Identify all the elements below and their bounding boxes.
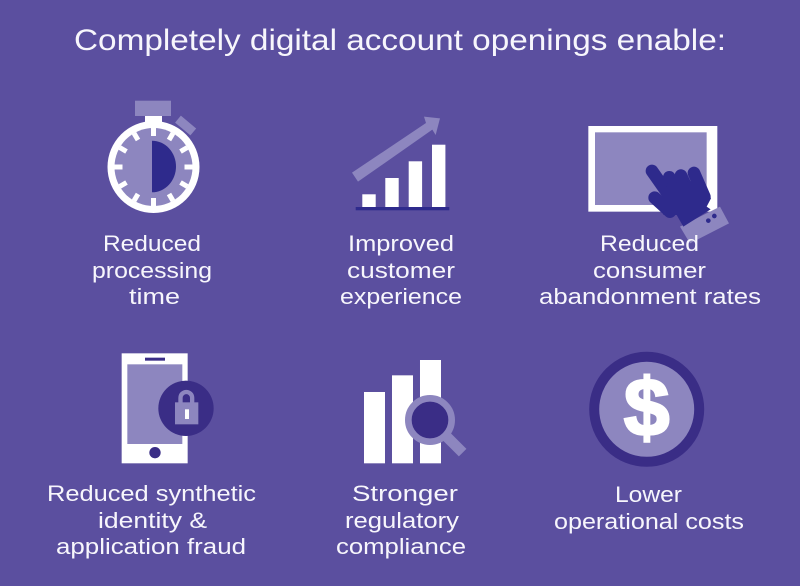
label: reduced processing time: [92, 231, 212, 309]
label: reduced synthetic identity and application fraud: Reduced synthetic: [47, 481, 256, 506]
label: reduced processing time: time: [129, 284, 180, 309]
label: reduced processing time: processing: [92, 258, 212, 283]
label: lower operational costs: operational costs: [554, 509, 744, 534]
label: reduced synthetic identity and application fraud: [47, 481, 256, 559]
icon: dollar coin: [594, 357, 699, 462]
icon: stopwatch: [108, 101, 200, 213]
label: lower operational costs: Lower: [615, 482, 682, 507]
label: reduced consumer abandonment rates: [539, 231, 761, 309]
label: stronger regulatory compliance: regulatory: [345, 508, 459, 533]
icon: rising bar chart with arrow: [352, 117, 449, 210]
label: improved customer experience: experience: [340, 284, 462, 309]
icon: dollar coin: $: [624, 362, 670, 454]
label: reduced synthetic identity and application fraud: identity &: [98, 508, 207, 533]
label: reduced synthetic identity and application fraud: application fraud: [56, 534, 246, 559]
label: stronger regulatory compliance: Stronger: [352, 481, 458, 506]
label: stronger regulatory compliance: [336, 481, 466, 559]
label: stronger regulatory compliance: compliance: [336, 534, 466, 559]
label: lower operational costs: [554, 482, 744, 534]
label: reduced processing time: Reduced: [103, 231, 201, 256]
title: Completely digital account openings enable:: [74, 24, 726, 57]
icon: bars with magnifier: [364, 360, 463, 463]
label: improved customer experience: customer: [347, 258, 455, 283]
label: reduced consumer abandonment rates: consumer: [593, 258, 706, 283]
label: improved customer experience: Improved: [348, 231, 454, 256]
icon: hand touching tablet: [588, 126, 729, 243]
icon: phone with padlock: [122, 353, 214, 463]
label: reduced consumer abandonment rates: Reduced: [600, 231, 699, 256]
label: reduced consumer abandonment rates: abandonment rates: [539, 284, 761, 309]
label: improved customer experience: [340, 231, 462, 309]
